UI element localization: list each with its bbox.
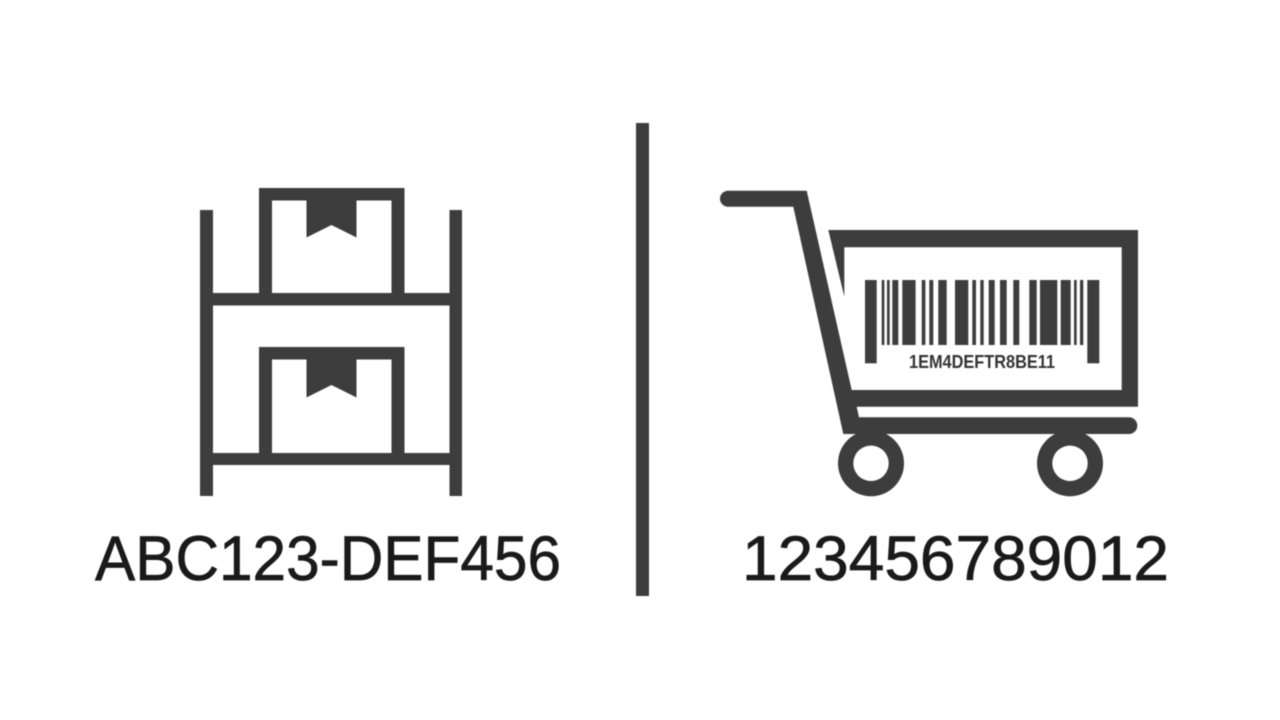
upper box <box>259 188 404 293</box>
left wheel <box>838 430 904 496</box>
divider line <box>636 123 649 596</box>
shelf frame <box>200 210 462 496</box>
icon: shopping cart with barcode <box>720 191 1138 496</box>
label: SKU code: ABC123-DEF456 <box>95 524 561 594</box>
lower box <box>259 347 404 453</box>
right wheel <box>1037 430 1103 496</box>
icon: warehouse shelf with boxes <box>200 188 462 496</box>
barcode digits: 1EM4DEFTR8BE11 <box>909 352 1055 372</box>
barcode <box>865 280 1099 363</box>
label: UPC code: 123456789012 <box>742 524 1169 594</box>
cart handle and frame <box>720 191 1138 434</box>
